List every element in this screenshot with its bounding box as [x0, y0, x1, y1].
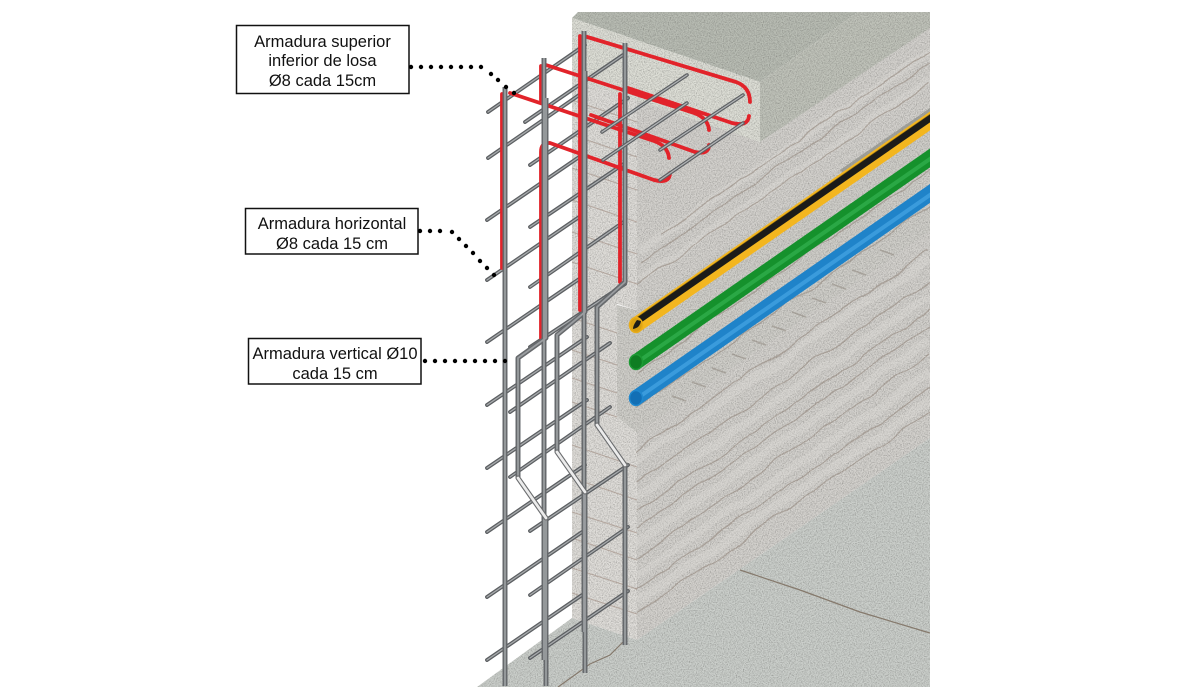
callout: armadura horizontal: Armadura horizontal: [258, 215, 406, 233]
recess with pipes: [617, 305, 637, 433]
board highlights on right face: [637, 50, 930, 602]
callout: armadura vertical: [248, 338, 421, 384]
slab right face: [760, 12, 930, 142]
callout: armadura horizontal: [246, 208, 418, 254]
rebar mesh: [487, 31, 750, 686]
callout: armadura superior: Armadura superior: [254, 33, 391, 51]
horizontal bars, outer and inner planes: [487, 45, 628, 660]
pipe: blue: [630, 186, 940, 406]
concrete wall, slab and floor: [477, 12, 930, 687]
leader: armadura vertical: [423, 359, 507, 363]
callout: armadura superior: inferior de losa: [268, 52, 377, 70]
callout: armadura superior: [236, 26, 409, 94]
callout: armadura vertical: Armadura vertical Ø10: [252, 345, 418, 363]
vertical bars: [505, 31, 625, 686]
wall left face: [572, 76, 637, 640]
pipe: yellow with black stripe: [630, 108, 940, 332]
pipe: green: [630, 151, 940, 370]
board marks on left face: [572, 100, 637, 614]
callout: armadura vertical: cada 15 cm: [292, 365, 378, 383]
slab front face: [572, 18, 760, 142]
pipes: [630, 108, 940, 406]
recess shadow: [840, 108, 930, 175]
leader: armadura horizontal: [418, 229, 496, 277]
slab top face: [572, 12, 858, 82]
floor cracks: [558, 570, 930, 687]
leader: armadura superior: [409, 65, 516, 95]
callout: armadura horizontal: Ø8 cada 15 cm: [276, 235, 388, 253]
shadow marks on ledge: [672, 250, 894, 401]
floor: [477, 438, 930, 687]
slab top bars: [602, 75, 743, 180]
red horizontal reinforcement: [502, 36, 750, 338]
board marks on right face: [637, 50, 930, 613]
callout: armadura superior: Ø8 cada 15cm: [269, 72, 376, 90]
wall right face: [637, 28, 930, 640]
